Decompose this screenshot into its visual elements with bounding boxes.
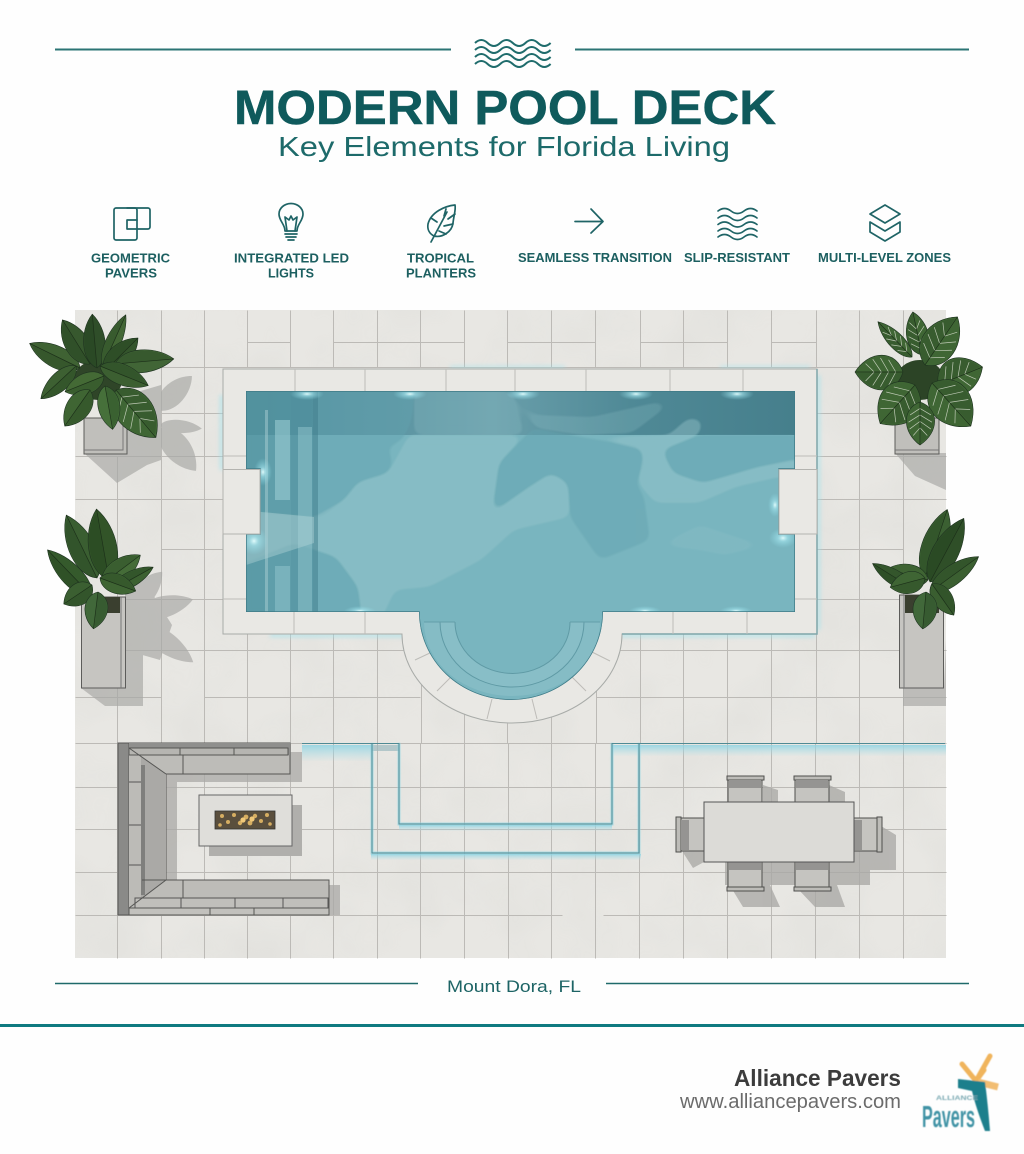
title: MODERN POOL DECK — [234, 82, 776, 135]
footer brand text: www.alliancepavers.com — [679, 1091, 901, 1113]
entry steps left — [246, 391, 318, 612]
light water ribbons — [318, 418, 794, 611]
planter: top right — [855, 307, 989, 454]
footer rule — [0, 1024, 1024, 1027]
pool water — [240, 380, 800, 715]
planter: top left — [25, 312, 175, 454]
foliage — [25, 312, 175, 449]
footer brand text: Alliance Pavers — [734, 1065, 901, 1091]
feature labels — [91, 250, 951, 280]
top shelf band — [246, 391, 795, 435]
planter shadows — [81, 368, 946, 706]
label: tropical planters: TROPICAL — [407, 250, 474, 266]
label: geometric pavers: GEOMETRIC — [91, 250, 171, 266]
sofa shadow — [166, 752, 340, 915]
pool lights — [240, 388, 797, 616]
LED channels between zones — [302, 743, 946, 860]
footer brand text — [679, 1065, 901, 1113]
brand logo: ALLIANCE — [936, 1096, 978, 1102]
header divider with wave ornament — [55, 40, 969, 67]
planter: bottom left — [40, 507, 157, 688]
foliage — [868, 505, 984, 630]
planter box — [895, 418, 939, 454]
foliage — [40, 507, 157, 630]
dining set shadows — [682, 785, 896, 907]
label: tropical planters — [406, 250, 476, 280]
icon: LED bulb — [279, 204, 303, 240]
icon: layers — [870, 205, 900, 241]
LED glow around pool coping — [220, 366, 820, 637]
brand logo — [922, 1056, 998, 1134]
subtitle: Key Elements for Florida Living — [278, 131, 730, 162]
planter box — [84, 418, 127, 454]
semicircular steps — [424, 622, 600, 696]
icon: tropical leaf — [428, 205, 455, 242]
dining table — [704, 802, 854, 862]
label: integrated LED lights: INTEGRATED LED — [234, 250, 349, 266]
label: tropical planters: PLANTERS — [406, 266, 476, 280]
pool coping — [223, 369, 817, 723]
icon: slip-resistant waves — [718, 208, 757, 240]
label: integrated LED lights: LIGHTS — [268, 266, 314, 280]
icon: arrow — [575, 209, 603, 233]
panel: pool deck plan — [25, 307, 989, 958]
label: integrated LED lights — [234, 250, 349, 280]
icon: geometric pavers — [114, 208, 150, 240]
dark water patches — [318, 435, 794, 611]
label: geometric pavers — [91, 250, 171, 280]
label: geometric pavers: PAVERS — [105, 266, 157, 280]
label: multi-level zones: MULTI-LEVEL ZONES — [818, 250, 951, 265]
planter box — [900, 595, 944, 688]
icon: waves ornament — [475, 40, 551, 67]
dining chairs — [676, 776, 882, 891]
location label: Mount Dora, FL — [447, 977, 581, 996]
brand logo: Pavers — [922, 1099, 975, 1134]
foliage — [855, 307, 989, 445]
deck surface — [75, 310, 946, 958]
fire pit — [199, 795, 302, 856]
label: slip-resistant: SLIP-RESISTANT — [684, 250, 790, 265]
sectional sofa — [118, 743, 329, 915]
feature row: key elements — [114, 204, 900, 242]
planter box — [82, 597, 126, 688]
pool jump tabs — [223, 470, 817, 534]
planter: bottom right — [868, 505, 984, 688]
label: seamless transition: SEAMLESS TRANSITION — [518, 250, 672, 265]
